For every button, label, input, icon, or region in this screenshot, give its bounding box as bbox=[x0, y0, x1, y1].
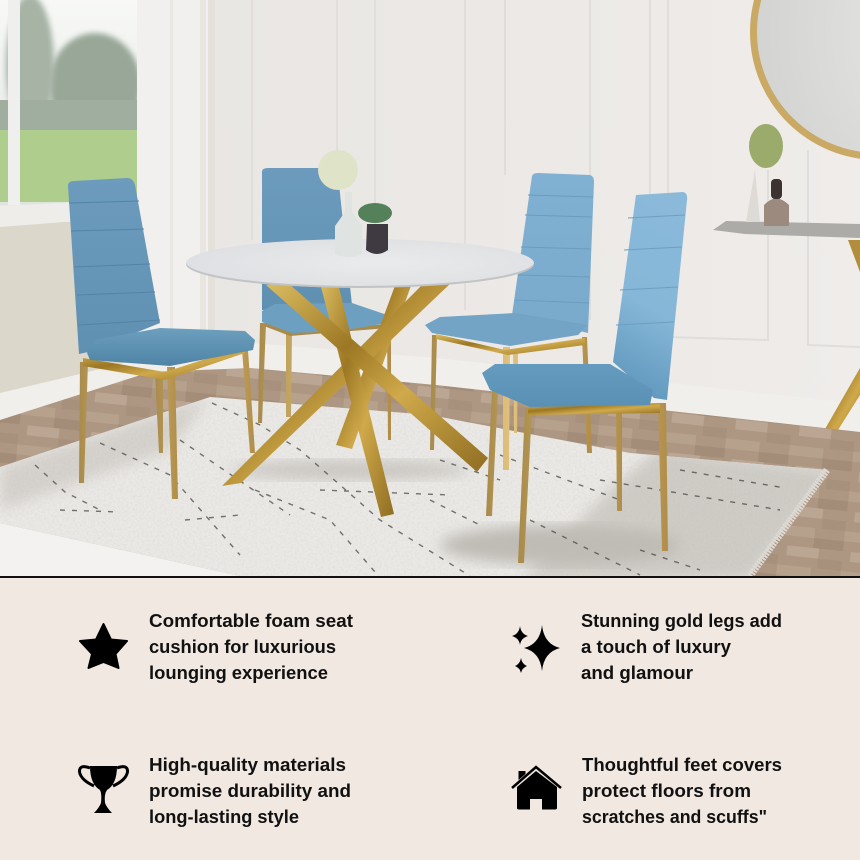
left chair bbox=[68, 178, 255, 499]
table legs bbox=[222, 282, 488, 517]
feature: gold legs bbox=[512, 610, 782, 683]
text: feet covers: Thoughtful feet covers bbox=[582, 754, 782, 775]
feature: foam seat bbox=[80, 610, 353, 683]
window with garden view bbox=[0, 0, 141, 227]
parquet floor bbox=[0, 368, 860, 576]
feature: feet covers bbox=[512, 754, 782, 827]
feature: quality materials bbox=[79, 754, 351, 827]
text: foam seat: lounging experience bbox=[149, 662, 328, 683]
icon: star bbox=[80, 624, 127, 668]
features panel bbox=[0, 578, 860, 860]
wall bbox=[0, 0, 860, 440]
console table and decor bbox=[713, 124, 860, 450]
round wall mirror bbox=[750, 0, 860, 160]
rug bbox=[0, 397, 860, 580]
right back chair bbox=[425, 173, 594, 470]
white floor corner bbox=[0, 523, 240, 576]
text: quality materials: High-quality materials bbox=[149, 754, 346, 775]
text: foam seat: cushion for luxurious bbox=[149, 636, 336, 657]
divider line bbox=[0, 576, 860, 578]
skirting bbox=[0, 340, 860, 432]
icon: house bbox=[512, 767, 561, 810]
marble table top bbox=[186, 239, 534, 288]
wall panel mouldings bbox=[252, 0, 860, 347]
text: foam seat: Comfortable foam seat bbox=[149, 610, 353, 631]
text: gold legs: a touch of luxury bbox=[581, 636, 732, 657]
text: feet covers: protect floors from bbox=[582, 780, 751, 801]
photo: dining room scene bbox=[0, 0, 860, 580]
left lower wall bbox=[0, 222, 215, 412]
text: gold legs: Stunning gold legs add bbox=[581, 610, 782, 631]
text: feet covers: scratches and scuffs" bbox=[582, 806, 767, 827]
icon: trophy bbox=[79, 766, 128, 813]
back chair bbox=[258, 168, 391, 440]
icon: sparkles bbox=[512, 625, 560, 673]
right front chair bbox=[482, 192, 687, 563]
text: quality materials: promise durability and bbox=[149, 780, 351, 801]
text: gold legs: and glamour bbox=[581, 662, 693, 683]
text: quality materials: long-lasting style bbox=[149, 806, 299, 827]
curtain bbox=[137, 0, 215, 345]
table vase and plant bbox=[318, 150, 392, 257]
